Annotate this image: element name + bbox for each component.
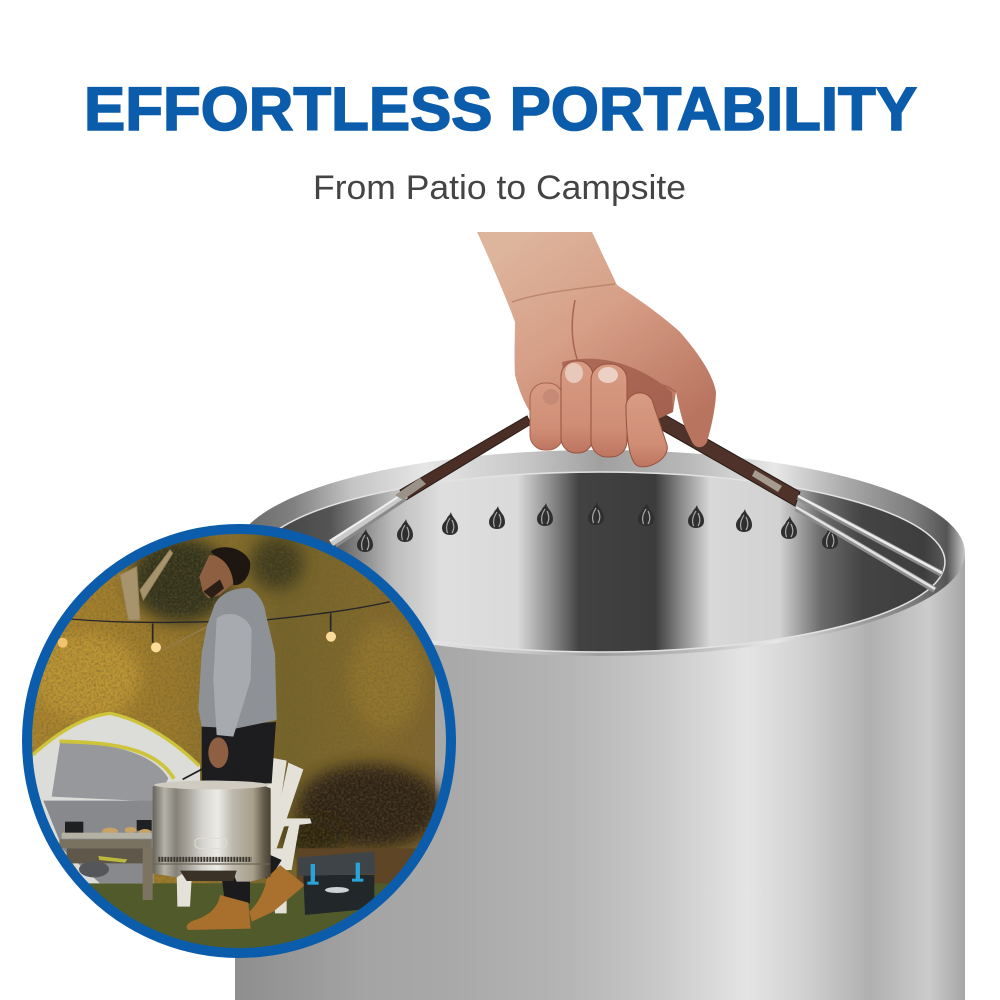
finger three bbox=[591, 364, 627, 457]
finger two bbox=[561, 361, 593, 453]
tree trunk bbox=[120, 550, 207, 650]
fire pit interior bbox=[255, 472, 945, 652]
carry handles bbox=[182, 768, 202, 780]
man carrying fire pit bbox=[183, 547, 305, 930]
finger one bbox=[530, 383, 563, 450]
table with food bbox=[59, 820, 153, 900]
blue ring bbox=[27, 529, 451, 953]
arm and palm bbox=[477, 232, 716, 447]
grass bbox=[89, 883, 389, 948]
wrist crease bbox=[512, 284, 615, 302]
knuckle shadow bbox=[562, 359, 673, 440]
ground leaves bbox=[296, 848, 416, 884]
nail two bbox=[565, 363, 583, 383]
hoodie bbox=[198, 588, 277, 728]
cooler bbox=[298, 852, 375, 915]
fire pit product bbox=[235, 412, 965, 1000]
photo scene bbox=[20, 520, 443, 960]
title: EFFORTLESS PORTABILITY bbox=[84, 75, 917, 143]
beard bbox=[203, 579, 224, 598]
circular inset photo bbox=[20, 520, 451, 960]
subtitle: From Patio to Campsite bbox=[313, 169, 686, 207]
nail one bbox=[543, 389, 559, 405]
legs bbox=[202, 722, 276, 783]
boots bbox=[187, 895, 251, 930]
fire pit rim bbox=[235, 450, 965, 656]
flame cutouts bbox=[357, 502, 838, 552]
hand bbox=[208, 737, 228, 768]
string lights bbox=[58, 602, 390, 652]
thumb crease bbox=[572, 300, 676, 392]
left handle bbox=[329, 416, 531, 546]
tent bbox=[33, 713, 200, 883]
hand gripping handle bbox=[477, 232, 716, 467]
small fire pit bbox=[153, 781, 271, 882]
right handle bbox=[655, 412, 942, 590]
nail three bbox=[598, 367, 618, 383]
face bbox=[199, 555, 233, 598]
adirondack chair bbox=[177, 757, 312, 913]
fire pit body bbox=[235, 553, 965, 1000]
finger four bbox=[626, 393, 667, 467]
hair bbox=[211, 547, 250, 585]
foliage background bbox=[32, 534, 435, 884]
arm sleeve bbox=[213, 614, 252, 737]
